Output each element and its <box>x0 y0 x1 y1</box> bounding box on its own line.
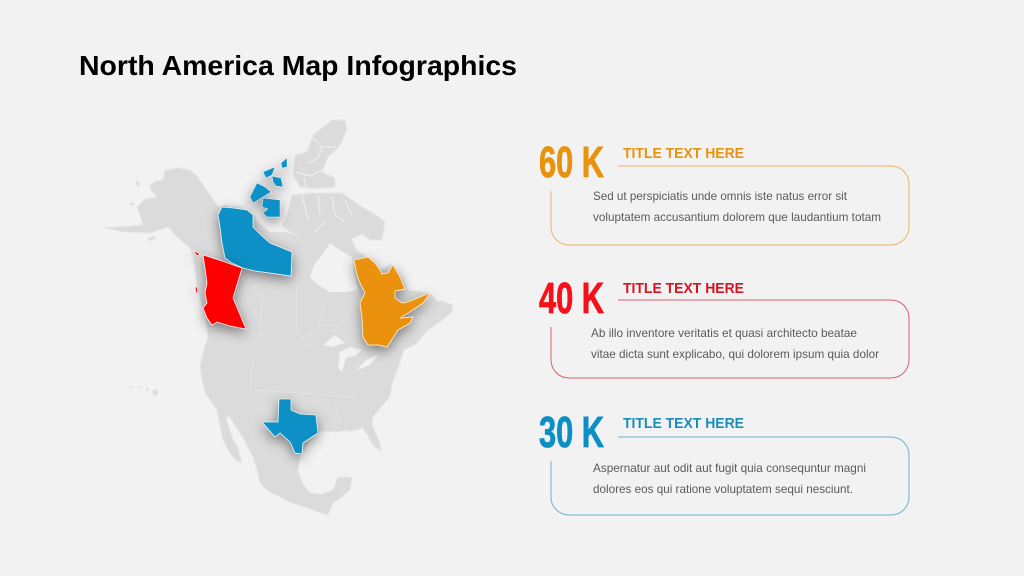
heading: title text: TITLE TEXT HERE <box>623 415 744 432</box>
map: gray landmass <box>102 120 453 515</box>
map: Hudson Bay and Great Lakes <box>310 243 378 436</box>
body text <box>591 326 879 361</box>
map: province and state lines <box>240 276 357 425</box>
map: Arctic channels <box>296 137 352 232</box>
map: British Columbia (red) <box>193 250 246 329</box>
panel: 60 K <box>539 138 909 245</box>
body text: dolores eos qui ratione voluptatem sequi nesciunt. <box>593 482 853 496</box>
Alaska and western Canada to Mexico <box>102 168 453 515</box>
outline box <box>551 437 909 515</box>
big number: 30 K: 30 K <box>539 408 604 457</box>
body text: voluptatem accusantium dolorem que laudantium totam <box>593 210 881 224</box>
panel: 40 K <box>539 274 909 378</box>
heading: title text: TITLE TEXT HERE <box>623 145 744 162</box>
map: Northwest Territories (blue) <box>218 207 292 276</box>
outline box <box>551 166 909 245</box>
Ellesmere and Queen Elizabeth islands <box>293 120 347 189</box>
map: Arctic islands (blue) <box>250 158 287 217</box>
Newfoundland <box>432 300 453 322</box>
map: North America <box>102 120 453 515</box>
Baffin and central Arctic islands <box>282 193 385 240</box>
title: North America Map Infographics <box>79 50 517 81</box>
body text: Sed ut perspiciatis unde omnis iste natus error sit <box>593 189 848 203</box>
body text <box>593 189 881 224</box>
outline box <box>551 300 909 378</box>
map: Texas (blue) <box>262 399 318 454</box>
body text: Aspernatur aut odit aut fugit quia consequntur magni <box>593 461 866 475</box>
big number: 40 K: 40 K <box>539 274 604 323</box>
panel: 30 K <box>539 408 909 515</box>
big number: 60 K: 60 K <box>539 138 604 187</box>
map: Quebec (orange) <box>354 257 430 347</box>
body text: vitae dicta sunt explicabo, qui dolorem ipsum quia dolor <box>591 347 879 361</box>
body text <box>593 461 866 496</box>
heading: title text: TITLE TEXT HERE <box>623 280 744 297</box>
Aleutian islands <box>130 181 156 241</box>
body text: Ab illo inventore veritatis et quasi architecto beatae <box>591 326 857 340</box>
Hawaii <box>130 386 158 396</box>
